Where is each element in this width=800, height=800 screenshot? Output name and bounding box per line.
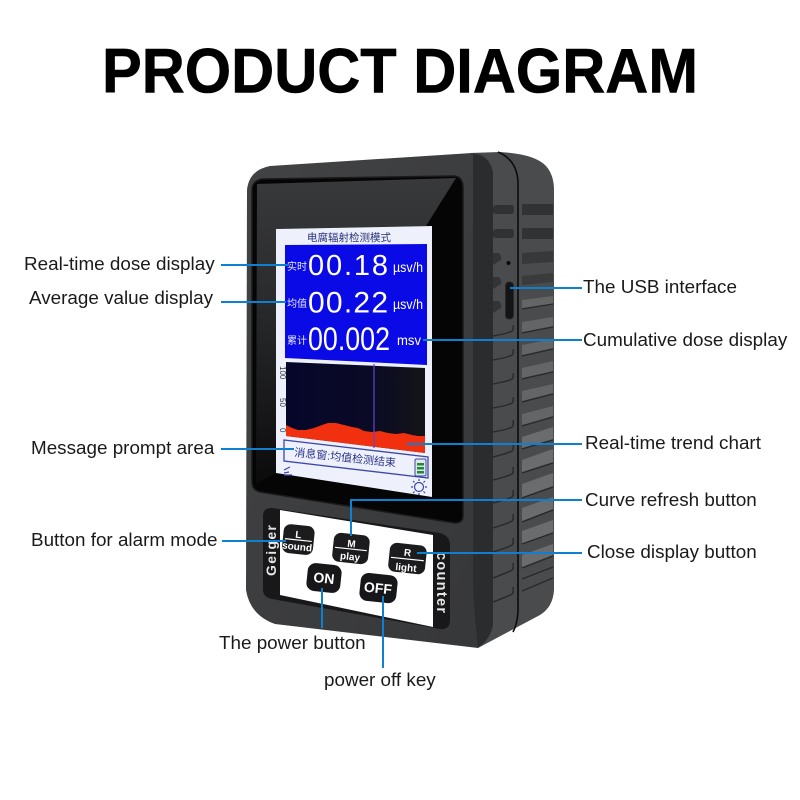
- label: real-time trend chart: Real-time trend chart: [585, 432, 762, 453]
- label: real-time dose display: Real-time dose display: [24, 253, 215, 274]
- reading: real-time: [287, 250, 423, 282]
- ON button: ON: [313, 569, 335, 587]
- L sound button: sound: [282, 540, 312, 554]
- button panel: [263, 508, 450, 629]
- cursor line: [373, 364, 375, 448]
- bezel glare: [256, 178, 456, 484]
- label: power off key: power off key: [324, 669, 436, 690]
- reading: real-time: µsv/h: [393, 259, 423, 275]
- device seam: [498, 152, 518, 632]
- reading: average: 00.22: [308, 286, 388, 320]
- message box: 消息窗:均值检测结束: [294, 445, 397, 470]
- axis labels: 100: [278, 366, 287, 380]
- label: close display button: Close display button: [587, 541, 757, 562]
- axis labels: 50: [278, 398, 287, 407]
- trend chart: [278, 362, 425, 453]
- side notches: [493, 205, 514, 602]
- LCD screen: [276, 226, 432, 497]
- label: button for alarm mode: Button for alarm mode: [31, 529, 217, 550]
- dark side band: [473, 154, 493, 647]
- device front shell: [246, 153, 493, 648]
- axis labels: 0: [278, 428, 287, 433]
- label: curve refresh button: [351, 489, 757, 536]
- reading: average: µsv/h: [393, 296, 423, 312]
- brightness icon: [411, 479, 427, 495]
- label: message prompt area: Message prompt area: [31, 437, 215, 458]
- reading: real-time: 00.18: [308, 250, 388, 282]
- M play button: [332, 532, 370, 565]
- reading: cumulative: 00.002: [308, 321, 390, 357]
- device side body: [470, 152, 554, 648]
- device: Geiger counter: [246, 152, 554, 648]
- message box: [284, 440, 428, 478]
- label: cumulative dose display: Cumulative dose display: [583, 329, 788, 350]
- OFF button: [359, 572, 398, 604]
- R light button: light: [395, 562, 418, 575]
- OFF button: OFF: [363, 579, 393, 597]
- red trend area: [286, 423, 425, 453]
- reading: real-time: 实时: [287, 260, 307, 273]
- label: curve refresh button: Curve refresh button: [585, 489, 757, 510]
- ON button: [306, 562, 342, 594]
- battery icon: [415, 459, 426, 476]
- signal icon: [284, 467, 292, 475]
- label: USB interface: The USB interface: [583, 276, 737, 297]
- label: the power button: The power button: [219, 632, 366, 653]
- indicator hole: [506, 261, 510, 265]
- reading panel: [285, 244, 427, 365]
- counter label: counter: [433, 552, 449, 614]
- USB port: [506, 282, 514, 319]
- R light button: [387, 542, 427, 576]
- M play button: play: [339, 551, 361, 564]
- screen bezel: [252, 176, 463, 523]
- title: PRODUCT DIAGRAM: [102, 36, 698, 106]
- screen heading: 电腐辐射检测模式: [307, 231, 391, 244]
- reading: cumulative: msv: [397, 332, 421, 348]
- R light button: R: [403, 548, 412, 559]
- reading: cumulative: 累计: [287, 334, 307, 347]
- label: power off key: [324, 596, 436, 690]
- reading: average: 均值: [287, 297, 307, 310]
- L sound button: [281, 524, 315, 556]
- axis labels: [278, 366, 287, 433]
- rear ridges: [522, 204, 553, 591]
- L sound button: L: [295, 530, 302, 541]
- Geiger label: Geiger: [263, 524, 279, 576]
- label: average value display: Average value display: [29, 287, 214, 308]
- M play button: M: [347, 539, 356, 550]
- reading: average: [287, 286, 423, 320]
